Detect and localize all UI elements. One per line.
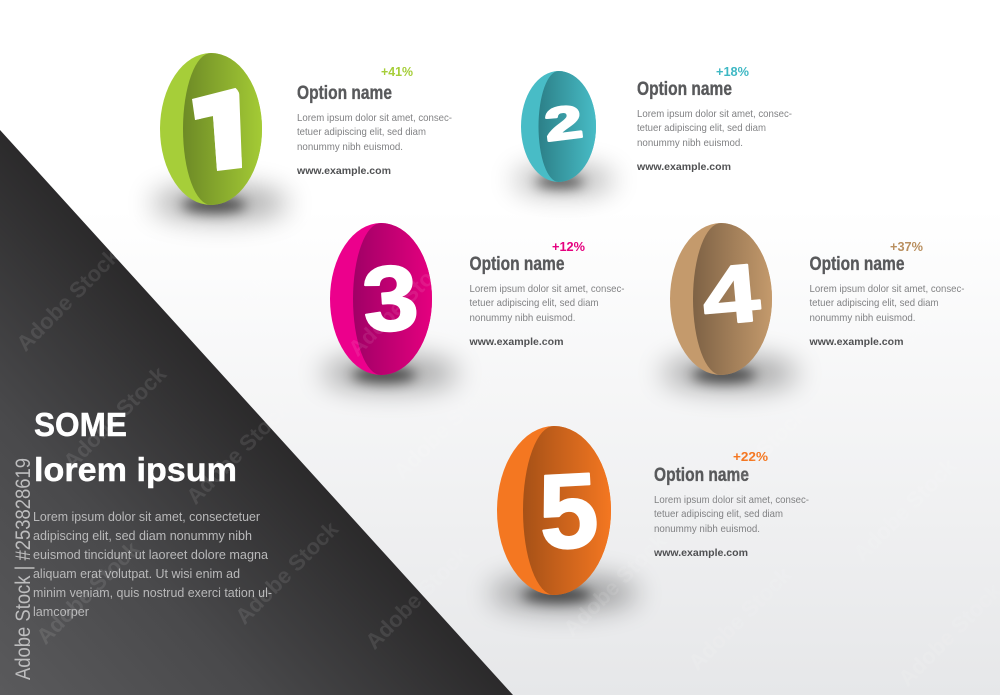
panel body text: adipiscing elit, sed diam nonummy nibh (33, 528, 252, 543)
option 2 text: Lorem ipsum dolor sit amet, consec- (637, 108, 792, 120)
option 1 text: +41% (381, 64, 413, 79)
dark diagonal panel (0, 130, 513, 695)
option 1 text: Lorem ipsum dolor sit amet, consec- (297, 112, 452, 124)
option 4 text: Option name (810, 254, 904, 275)
stock watermarks: Adobe Stock (388, 371, 502, 484)
option 4 text: tetuer adipiscing elit, sed diam (810, 297, 939, 309)
panel heading (34, 406, 237, 488)
stock watermarks: Adobe Stock (358, 88, 472, 201)
option 1 egg: 1 (186, 77, 248, 192)
option 2 egg (514, 71, 614, 192)
option 2 egg: 2 (542, 96, 585, 151)
option 4 egg: 4 (699, 246, 764, 343)
option 4 text: nonummy nibh euismod. (810, 312, 916, 324)
panel body text: lamcorper (33, 604, 90, 619)
option 5 text: www.example.com (653, 547, 748, 559)
option 1 text (296, 64, 452, 177)
option 1 text: nonummy nibh euismod. (297, 141, 403, 153)
stock watermarks: Adobe Stock (848, 453, 962, 566)
option 3 egg: 3 (359, 246, 422, 352)
option 4 egg (662, 223, 798, 389)
stock watermarks: Adobe Stock (218, 215, 332, 328)
option 2 text: Option name (637, 79, 732, 100)
option 5 text: Option name (654, 465, 749, 486)
stock watermarks: Adobe Stock (698, 402, 812, 515)
option 2 text: www.example.com (636, 161, 731, 173)
option 3 text: Option name (470, 254, 564, 275)
option 2 text: nonummy nibh euismod. (637, 137, 743, 149)
option 5 text: nonummy nibh euismod. (654, 523, 760, 535)
stock watermarks: Adobe Stock (558, 528, 672, 641)
stock watermarks: Adobe Stock (713, 63, 827, 176)
option 3 text: www.example.com (468, 336, 564, 348)
option 5 egg: 5 (536, 451, 601, 572)
panel body text: aliquam erat volutpat. Ut wisi enim ad (33, 566, 240, 581)
option 1 text: Option name (297, 83, 392, 104)
option 1 text: www.example.com (296, 165, 391, 177)
panel body text (33, 509, 272, 619)
option 2 text: +18% (716, 64, 749, 79)
option 3 text: nonummy nibh euismod. (470, 312, 576, 324)
stock watermarks: Adobe Stock (48, 53, 162, 166)
vertical stock credit: Adobe Stock | #253828619 (12, 458, 35, 680)
panel body text: Lorem ipsum dolor sit amet, consectetuer (33, 509, 261, 524)
option 3 text: +12% (552, 239, 585, 254)
option 5 text: Lorem ipsum dolor sit amet, consec- (654, 494, 809, 506)
stock watermarks: Adobe Stock (58, 361, 172, 474)
option 5 egg (490, 426, 638, 610)
panel heading: SOME (34, 406, 127, 443)
option 1 egg (152, 53, 288, 219)
option 3 text (468, 239, 625, 348)
stock watermarks: Adobe Stock (31, 536, 145, 649)
panel body text: minim veniam, quis nostrud exerci tation ul- (33, 585, 272, 600)
option 3 egg (322, 223, 458, 389)
stock watermarks: Adobe Stock (683, 562, 797, 675)
option 4 text: +37% (890, 239, 923, 254)
option 4 text: Lorem ipsum dolor sit amet, consec- (810, 283, 965, 295)
option 2 text: tetuer adipiscing elit, sed diam (637, 122, 766, 134)
stock watermarks: Adobe Stock (230, 516, 344, 629)
option 5 text: +22% (733, 449, 768, 464)
stock watermarks: Adobe Stock (360, 541, 474, 654)
panel body text: euismod tincidunt ut laoreet dolore magna (33, 547, 269, 562)
stock watermarks: Adobe Stock (528, 245, 642, 358)
option 3 text: tetuer adipiscing elit, sed diam (470, 297, 599, 309)
panel heading: lorem ipsum (34, 451, 237, 488)
stock watermarks: Adobe Stock (11, 243, 125, 356)
option 5 text (653, 449, 809, 559)
stock watermarks: Adobe Stock (883, 248, 997, 361)
option 4 text: www.example.com (808, 336, 904, 348)
stock watermarks: Adobe Stock (181, 396, 295, 509)
option 5 text: tetuer adipiscing elit, sed diam (654, 508, 783, 520)
option 1 text: tetuer adipiscing elit, sed diam (297, 126, 426, 138)
option 3 text: Lorem ipsum dolor sit amet, consec- (470, 283, 625, 295)
option 2 text (636, 64, 792, 173)
option 4 text (808, 239, 965, 348)
stock watermarks: Adobe Stock (343, 248, 457, 361)
